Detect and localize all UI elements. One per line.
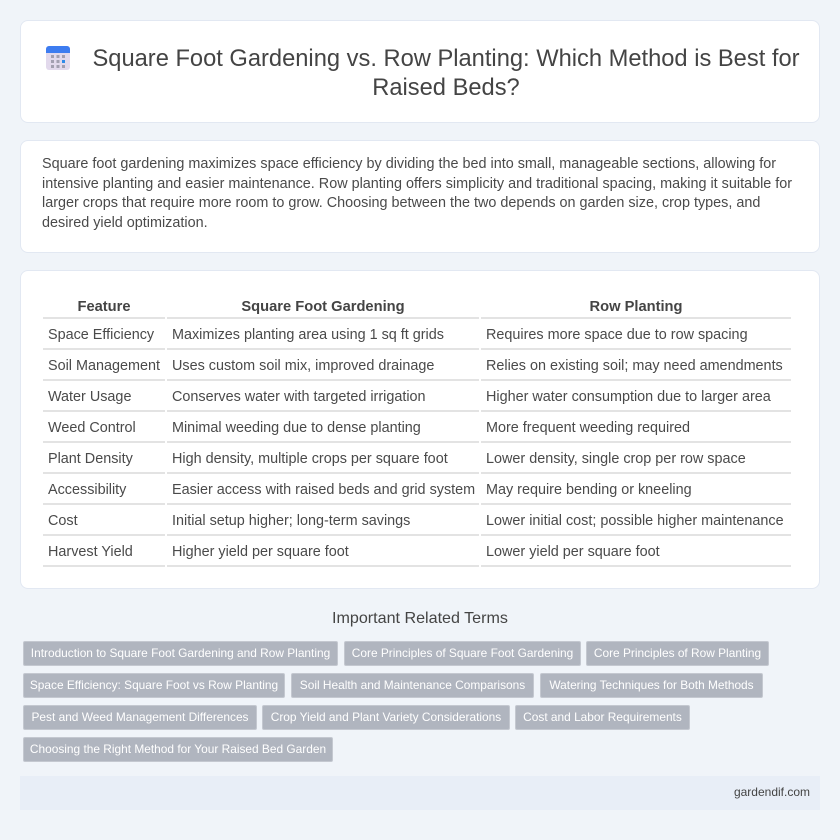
comparison table panel [20, 270, 820, 589]
row: water usage: Conserves water with targeted irrigation [172, 389, 426, 405]
row: plant density: Plant Density [48, 451, 133, 467]
row: plant density: Lower density, single crop per row space [486, 451, 746, 467]
header panel [20, 20, 820, 123]
row: soil management: Relies on existing soil; may need amendments [486, 358, 783, 374]
tag [23, 737, 333, 762]
tag: Crop Yield and Plant Variety Considerations [271, 710, 501, 724]
intro text panel [20, 140, 820, 253]
title [92, 46, 800, 101]
row: cost: Initial setup higher; long-term savings [172, 513, 410, 529]
row: accessibility: Easier access with raised beds and grid system [172, 482, 475, 498]
tag [344, 641, 581, 666]
tag: Core Principles of Row Planting [594, 646, 761, 660]
row: space efficiency [43, 327, 791, 350]
row: plant density [43, 451, 791, 474]
row: soil management [43, 358, 791, 381]
row: weed control: Minimal weeding due to dense planting [172, 420, 421, 436]
intro paragraph: Square foot gardening maximizes space efficiency by dividing the bed into small, manageable sections, allowing for [42, 156, 776, 172]
tag [23, 673, 285, 698]
intro paragraph: larger crops that require more room to grow. Choosing between the two depends on garden size, crop types, and [42, 195, 760, 211]
tag [23, 641, 338, 666]
row: accessibility: May require bending or kneeling [486, 482, 692, 498]
footer bar [20, 776, 820, 810]
related terms heading: Important Related Terms [332, 609, 508, 627]
tag [262, 705, 510, 730]
tag [540, 673, 763, 698]
tag: Introduction to Square Foot Gardening and Row Planting [31, 646, 330, 660]
row: cost: Cost [48, 513, 78, 529]
row: harvest yield: Harvest Yield [48, 544, 133, 560]
intro paragraph: desired yield optimization. [42, 214, 208, 230]
tag: Core Principles of Square Foot Gardening [352, 646, 573, 660]
row: weed control: Weed Control [48, 420, 136, 436]
row: cost [43, 513, 791, 536]
tag: Cost and Labor Requirements [523, 710, 682, 724]
table header: Row Planting [589, 299, 683, 315]
tag: Soil Health and Maintenance Comparisons [300, 678, 525, 692]
row: weed control [43, 420, 791, 443]
row: accessibility [43, 482, 791, 505]
row: space efficiency: Space Efficiency [48, 327, 154, 343]
table header [43, 299, 791, 319]
row: space efficiency: Requires more space due to row spacing [486, 327, 748, 343]
row: water usage [43, 389, 791, 412]
footer source: gardendif.com [734, 785, 810, 799]
tag: Choosing the Right Method for Your Raised Bed Garden [30, 742, 326, 756]
tag: Pest and Weed Management Differences [31, 710, 249, 724]
row: water usage: Water Usage [48, 389, 131, 405]
icon: calendar grid [46, 46, 70, 70]
title: Raised Beds? [372, 75, 520, 101]
tag [515, 705, 690, 730]
row: weed control: More frequent weeding required [486, 420, 690, 436]
table header: Square Foot Gardening [241, 299, 405, 315]
title: Square Foot Gardening vs. Row Planting: Which Method is Best for [92, 46, 800, 72]
table header: Feature [77, 299, 131, 315]
related terms tags [23, 641, 769, 762]
intro paragraph [42, 156, 792, 230]
row: harvest yield: Lower yield per square foot [486, 544, 660, 560]
row: soil management: Soil Management [48, 358, 160, 374]
intro paragraph: intensive planting and easier maintenance. Row planting offers simplicity and traditional spacing, making it suitable for [42, 176, 792, 192]
tag [23, 705, 257, 730]
row: accessibility: Accessibility [48, 482, 126, 498]
row: space efficiency: Maximizes planting area using 1 sq ft grids [172, 327, 444, 343]
tag: Watering Techniques for Both Methods [549, 678, 754, 692]
tag [586, 641, 769, 666]
row: plant density: High density, multiple crops per square foot [172, 451, 448, 467]
row: water usage: Higher water consumption due to larger area [486, 389, 771, 405]
row: soil management: Uses custom soil mix, improved drainage [172, 358, 434, 374]
tag: Space Efficiency: Square Foot vs Row Planting [30, 678, 278, 692]
tag [291, 673, 534, 698]
row: cost: Lower initial cost; possible higher maintenance [486, 513, 784, 529]
row: harvest yield [43, 544, 791, 567]
row: harvest yield: Higher yield per square foot [172, 544, 349, 560]
